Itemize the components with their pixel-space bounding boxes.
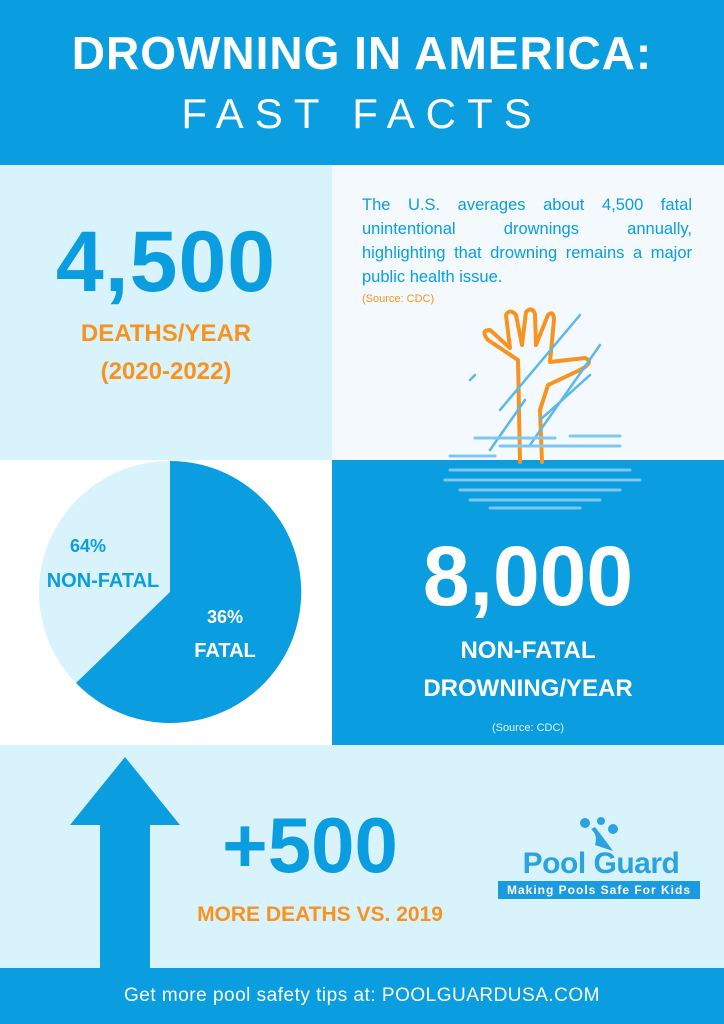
panel: 8,000 stat: 8,000 [423,529,633,623]
panel: 8,000 stat: DROWNING/YEAR [423,675,633,702]
footer: Get more pool safety tips at: POOLGUARDUSA.COM [124,985,600,1006]
pie chart: FATAL [194,640,256,662]
panel: description and hand [332,165,724,460]
logo: Pool Guard [498,817,700,899]
panel: 8,000 stat: NON-FATAL [460,637,596,664]
pie chart: NON-FATAL [47,570,159,592]
logo: Pool Guard: Pool Guard [523,847,679,880]
illustration: drowning hand [444,307,642,510]
logo: Pool Guard: Making Pools Safe For Kids [507,883,691,897]
subtitle: FAST FACTS [181,90,543,137]
header [0,0,724,165]
title: DROWNING IN AMERICA: [72,27,652,79]
panel: 8,000 stat: (Source: CDC) [492,722,564,734]
footer [0,968,724,1024]
panel: 4,500 stat: DEATHS/YEAR [81,320,251,347]
panel: +500: MORE DEATHS VS. 2019 [197,903,443,926]
panel: +500 [0,745,724,968]
source: (Source: CDC) [362,293,434,305]
panel: +500: +500 [222,801,398,889]
pie chart [0,460,332,745]
pie chart: 64% [70,536,106,556]
panel: 8,000 stat [332,460,724,745]
pie chart: 36% [207,607,243,627]
panel: 4,500 stat: 4,500 [56,214,276,310]
text block: The U.S. averages about 4,500 fatal unintentional drownings annually, highlighting that drowning remains a major public health issue. [362,196,692,286]
panel: 4,500 stat [0,165,332,460]
panel: 4,500 stat: (2020-2022) [101,358,231,385]
icon: up arrow [70,757,180,968]
